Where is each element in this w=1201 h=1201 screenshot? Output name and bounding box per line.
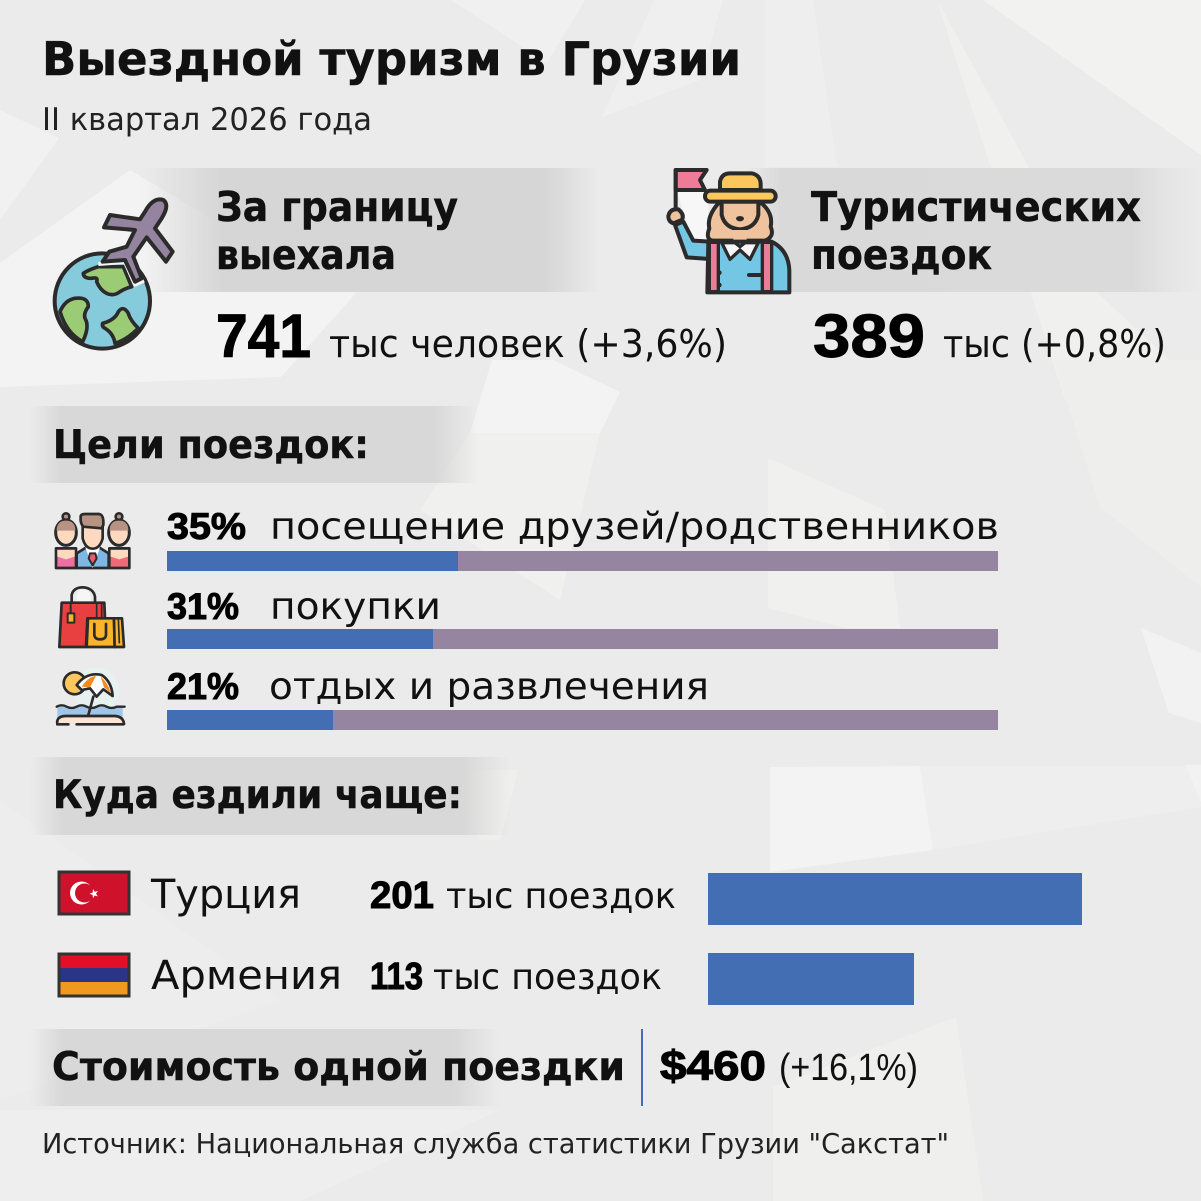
- heading: Туристических: [811, 183, 1141, 231]
- icon: shopping bags: [59, 587, 124, 647]
- value note: тыс (+0,8%): [943, 322, 1166, 366]
- icon: beach: [57, 667, 125, 724]
- trip unit: тыс поездок: [433, 957, 662, 998]
- flag: Armenia: [59, 954, 129, 996]
- bar: [708, 953, 914, 1005]
- item text: отдых и развлечения: [269, 665, 709, 708]
- flag: Turkey: [59, 872, 129, 914]
- subtitle: II квартал 2026 года: [42, 102, 372, 138]
- icon: tourist with flag: [668, 170, 789, 292]
- trip count: 113: [370, 956, 423, 998]
- source: Источник: Национальная служба статистики Грузии "Сакстат": [42, 1127, 949, 1160]
- item label: 31%: [167, 586, 239, 627]
- heading: Цели поездок:: [53, 423, 369, 468]
- heading band: [30, 406, 478, 483]
- item text: покупки: [270, 585, 441, 628]
- bar: [708, 873, 1082, 925]
- panel: trip cost: [30, 1029, 918, 1106]
- heading: За границу: [216, 183, 458, 231]
- panel: trip purposes: [30, 406, 999, 730]
- cost value: $460: [660, 1042, 766, 1089]
- heading: Куда ездили чаще:: [53, 773, 462, 818]
- trip count: 201: [370, 875, 434, 917]
- item text: посещение друзей/родственников: [270, 505, 999, 548]
- value: 389: [813, 302, 925, 370]
- heading: Стоимость одной поездки: [52, 1045, 625, 1090]
- heading: поездок: [811, 231, 992, 279]
- icon: family: [56, 513, 129, 568]
- progress bar: [167, 551, 998, 571]
- trip unit: тыс поездок: [446, 876, 676, 917]
- heading band: [745, 168, 1201, 292]
- panel: travelers abroad: [55, 168, 727, 370]
- panel: top destinations: [30, 757, 1082, 1005]
- item label: 21%: [167, 666, 239, 707]
- panel: tourist trips: [668, 168, 1201, 370]
- item label: 35%: [167, 506, 246, 547]
- value: 741: [216, 302, 311, 370]
- heading band: [30, 757, 510, 835]
- country name: Турция: [150, 872, 301, 918]
- progress bar: [167, 629, 998, 649]
- cost change: (+16,1%): [779, 1047, 918, 1089]
- heading: выехала: [216, 231, 396, 279]
- progress bar: [167, 710, 998, 730]
- value note: тыс человек (+3,6%): [329, 322, 727, 366]
- title: Выездной туризм в Грузии: [42, 32, 741, 86]
- heading band: [140, 168, 600, 292]
- country name: Армения: [151, 953, 342, 999]
- icon: globe and plane: [55, 199, 173, 349]
- heading band: [30, 1029, 500, 1106]
